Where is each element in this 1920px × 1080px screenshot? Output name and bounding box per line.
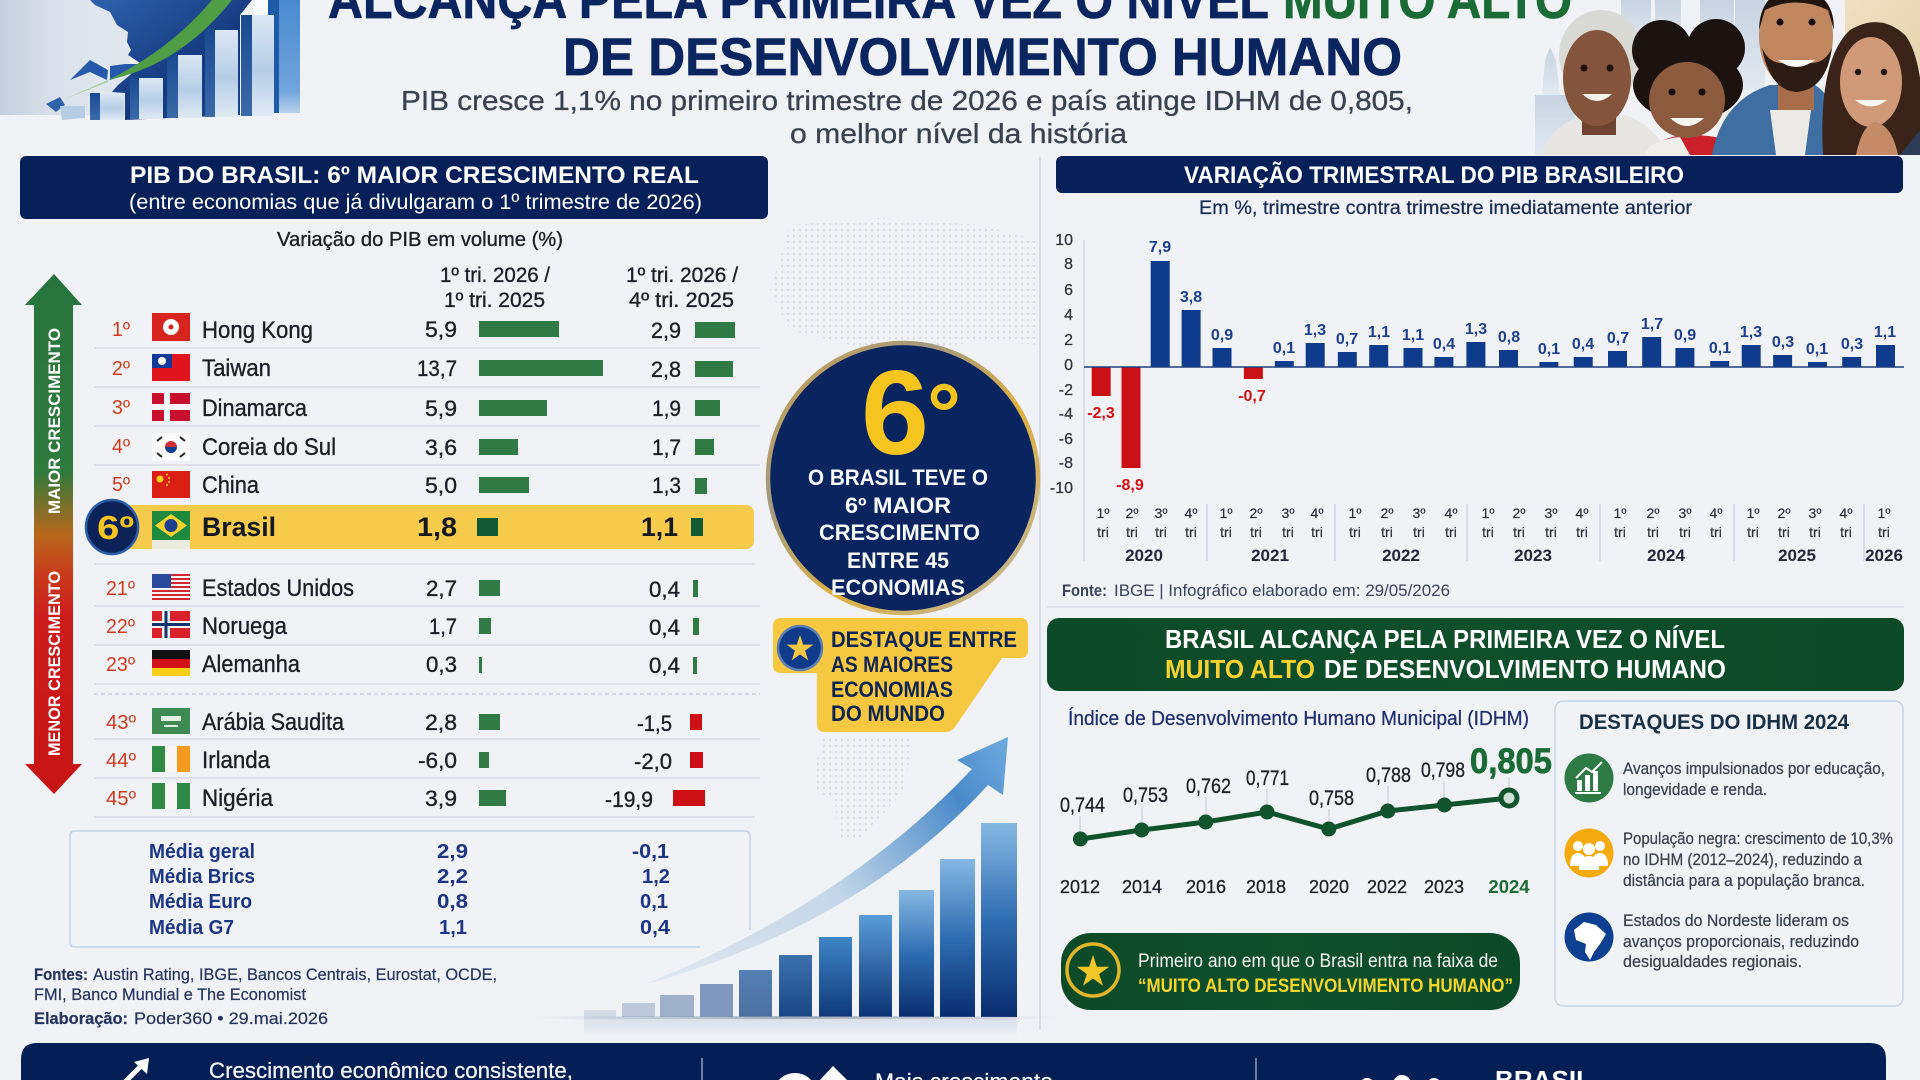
year labels: 2023 <box>1514 546 1552 565</box>
sources: FMI, Banco Mundial e The Economist <box>34 985 306 1004</box>
y axis: -6 <box>1059 431 1073 448</box>
panel heading: quarterly variation: VARIAÇÃO TRIMESTRAL DO PIB BRASILEIRO <box>1184 161 1684 189</box>
row: Irlanda: -6,0 <box>418 748 457 773</box>
highlight text: black population: distância para a população branca. <box>1623 871 1865 890</box>
row: Noruega: 0,4 <box>649 615 680 640</box>
averages box: 0,1 <box>640 891 668 913</box>
column headers: 1º tri. 2026 / <box>440 264 550 287</box>
circle: 6th place: 6º MAIOR <box>845 493 951 518</box>
subtitle <box>401 85 1413 149</box>
growth bars illustration <box>530 823 1060 1037</box>
panel: IDHM highlights <box>1555 701 1903 1006</box>
subtitle: PIB cresce 1,1% no primeiro trimestre de 2026 e país atinge IDHM de 0,805, <box>401 85 1413 116</box>
row: Noruega: Noruega <box>202 613 288 640</box>
quarter labels: tri <box>1679 524 1691 540</box>
badge: 6th place: 6º <box>97 509 134 546</box>
circle: 6th place: O BRASIL TEVE O <box>808 465 988 490</box>
quarter labels: tri <box>1311 524 1323 540</box>
quarter labels: 1º <box>1349 505 1361 521</box>
header illustration: people and skyline <box>1535 0 1920 155</box>
chart title: Índice de Desenvolvimento Humano Municipal (IDHM) <box>1068 707 1529 730</box>
panel heading: PIB do Brasil: (entre economias que já divulgaram o 1º trimestre de 2026) <box>129 190 702 214</box>
quarter labels: tri <box>1545 524 1557 540</box>
callout: first year in the band: “MUITO ALTO DESENVOLVIMENTO HUMANO” <box>1138 976 1513 997</box>
line chart: IDHM: 0,798 <box>1421 759 1465 782</box>
callout: highlight among largest economies: AS MAIORES <box>831 652 953 677</box>
value labels: 1,7 <box>1641 316 1663 333</box>
quarter labels: 2º <box>1513 505 1525 521</box>
averages box <box>70 831 750 947</box>
highlight text: northeast: desigualdades regionais. <box>1623 952 1802 971</box>
badge: 6th place <box>86 500 138 554</box>
row: Coreia do Sul: 3,6 <box>425 435 457 460</box>
row: Irlanda: Irlanda <box>202 747 271 774</box>
value labels: 0,4 <box>1433 336 1455 353</box>
quarter labels: tri <box>1445 524 1457 540</box>
highlights heading: DESTAQUES DO IDHM 2024 <box>1579 710 1849 734</box>
line chart: IDHM <box>1060 742 1552 897</box>
year labels: 2024 <box>1647 546 1685 565</box>
row: Dinamarca <box>112 393 720 422</box>
averages box: 0,4 <box>640 917 671 939</box>
value labels <box>1149 239 1896 358</box>
circle: 6th place <box>768 343 1038 613</box>
circle: 6th place: ° <box>927 367 961 462</box>
value labels: 0,1 <box>1806 341 1828 358</box>
averages box: 0,8 <box>437 891 468 913</box>
averages box: Média Brics <box>149 866 255 888</box>
quarter labels: 4º <box>1445 505 1457 521</box>
icon: star <box>778 626 822 670</box>
grandmother <box>1542 10 1668 155</box>
quarter labels: tri <box>1381 524 1393 540</box>
year labels: 2021 <box>1251 546 1289 565</box>
arrow: rising growth <box>643 737 1008 985</box>
row: Nigéria: -19,9 <box>605 787 653 812</box>
row: Hong Kong: 5,9 <box>425 317 457 342</box>
row: Alemanha: 0,3 <box>426 652 457 677</box>
row: Estados Unidos <box>106 574 698 602</box>
y axis: 6 <box>1064 282 1073 299</box>
quarter labels: tri <box>1778 524 1790 540</box>
y axis: -10 <box>1050 480 1073 497</box>
bar chart: quarterly GDP: -8,9 <box>1116 477 1144 494</box>
highlight text: black population <box>1623 829 1893 890</box>
value labels: 0,1 <box>1709 340 1731 357</box>
quarter labels: 1º <box>1097 505 1109 521</box>
row: Estados Unidos: Estados Unidos <box>202 575 354 602</box>
row: Dinamarca: 5,9 <box>425 396 457 421</box>
y axis: -8 <box>1059 455 1073 472</box>
line chart: IDHM: 2012 <box>1060 877 1100 897</box>
row: Hong Kong: 2,9 <box>651 318 681 343</box>
column headers: 1º tri. 2025 <box>444 289 545 312</box>
value labels: 7,9 <box>1149 239 1171 256</box>
quarter labels: tri <box>1126 524 1138 540</box>
value labels: 1,1 <box>1874 324 1896 341</box>
row: Nigéria: 45º <box>106 788 137 810</box>
value labels: 3,8 <box>1180 289 1202 306</box>
averages box: 2,2 <box>437 866 468 888</box>
averages box: 1,2 <box>642 866 670 888</box>
circle: 6th place: CRESCIMENTO <box>819 520 980 545</box>
value labels: 0,3 <box>1841 336 1863 353</box>
highlight text: northeast <box>1623 911 1859 971</box>
row: Dinamarca: 1,9 <box>652 396 681 421</box>
quarter labels: tri <box>1185 524 1197 540</box>
line chart: IDHM: 2023 <box>1424 877 1464 897</box>
quarter labels: 2º <box>1778 505 1790 521</box>
line chart: IDHM: 2014 <box>1122 877 1162 897</box>
bar chart: quarterly GDP: -0,7 <box>1238 388 1266 405</box>
chart caption: Variação do PIB em volume (%) <box>277 228 563 251</box>
row: Arábia Saudita <box>106 708 702 736</box>
highlight text: education <box>1623 759 1885 799</box>
quarter labels: tri <box>1155 524 1167 540</box>
arrow: growth scale: MENOR CRESCIMENTO <box>45 571 64 756</box>
line chart: IDHM: 0,758 <box>1309 787 1354 810</box>
quarter labels: 2º <box>1381 505 1393 521</box>
panel heading: very high development: MUITO ALTO <box>1165 654 1315 684</box>
bar chart: quarterly GDP <box>1050 232 1904 565</box>
value labels: 0,4 <box>1572 336 1594 353</box>
panel: quarterly GDP variation <box>1050 156 1904 600</box>
callout: highlight among largest economies: ECONOMIAS <box>831 677 953 702</box>
value labels: 0,3 <box>1772 334 1794 351</box>
row: Irlanda <box>106 746 703 774</box>
line chart: IDHM: 2020 <box>1309 877 1349 897</box>
quarter labels: tri <box>1576 524 1588 540</box>
row: Nigéria: 3,9 <box>425 786 457 811</box>
row: Alemanha: 23º <box>106 654 136 676</box>
line chart: IDHM: 0,805 <box>1470 742 1552 781</box>
quarter labels: 3º <box>1282 505 1294 521</box>
year labels: 2026 <box>1865 546 1903 565</box>
y axis: -2 <box>1059 382 1073 399</box>
quarter labels: 3º <box>1413 505 1425 521</box>
panel heading: very high development: BRASIL ALCANÇA PELA PRIMEIRA VEZ O NÍVEL <box>1165 624 1725 654</box>
value labels: 0,7 <box>1607 330 1629 347</box>
column headers <box>440 264 738 312</box>
line chart: IDHM: 2022 <box>1367 877 1407 897</box>
girl <box>1632 19 1746 155</box>
vertical divider <box>1039 157 1041 1030</box>
quarter labels: 4º <box>1185 505 1197 521</box>
chart source: IBGE | Infográfico elaborado em: 29/05/2026 <box>1114 581 1450 600</box>
y axis: 8 <box>1064 256 1073 273</box>
sources: Austin Rating, IBGE, Bancos Centrais, Eurostat, OCDE, <box>93 965 497 984</box>
row: Noruega <box>106 611 699 640</box>
man <box>1712 0 1837 155</box>
row: Dinamarca: 3º <box>112 397 131 419</box>
title <box>328 0 1572 87</box>
sources: Poder360 • 29.mai.2026 <box>134 1009 328 1028</box>
quarter labels: 1º <box>1220 505 1232 521</box>
quarter labels: tri <box>1097 524 1109 540</box>
row: Coreia do Sul <box>112 433 714 461</box>
value labels: 0,7 <box>1336 331 1358 348</box>
row: Coreia do Sul: 1,7 <box>652 435 681 460</box>
highlight text: black population: no IDHM (2012–2024), reduzindo a <box>1623 850 1862 869</box>
quarter labels: 4º <box>1840 505 1852 521</box>
row: Taiwan: 2,8 <box>651 357 681 382</box>
row: Brasil highlight: Brasil <box>202 512 276 542</box>
row: Estados Unidos: 2,7 <box>426 576 457 601</box>
quarter labels: 4º <box>1311 505 1323 521</box>
quarter labels: tri <box>1482 524 1494 540</box>
averages box: 2,9 <box>437 841 468 863</box>
row: Taiwan: Taiwan <box>202 355 271 382</box>
averages box: Média G7 <box>149 917 234 939</box>
row: Estados Unidos: 21º <box>106 578 136 600</box>
value labels: 0,9 <box>1211 327 1233 344</box>
quarter labels: tri <box>1250 524 1262 540</box>
quarter labels: tri <box>1840 524 1852 540</box>
icon: people <box>1360 1075 1441 1080</box>
line chart: IDHM: 0,771 <box>1246 767 1289 790</box>
row: Estados Unidos: 0,4 <box>649 577 680 602</box>
line chart: IDHM: 0,762 <box>1186 775 1231 798</box>
quarter labels: 1º <box>1878 505 1890 521</box>
row: China: China <box>202 472 260 499</box>
circle: 6th place: ENTRE 45 <box>847 548 949 573</box>
value labels: 0,8 <box>1498 329 1520 346</box>
y axis: 2 <box>1064 332 1073 349</box>
quarter labels: 2º <box>1250 505 1262 521</box>
sources <box>34 965 497 1028</box>
callout: highlight among largest economies: DO MUNDO <box>831 701 945 726</box>
quarter labels: 3º <box>1155 505 1167 521</box>
panel heading: quarterly variation <box>1056 156 1903 193</box>
year labels: 2020 <box>1125 546 1163 565</box>
row: Hong Kong: Hong Kong <box>202 317 313 344</box>
quarter labels: 2º <box>1647 505 1659 521</box>
dotted world map watermark <box>770 218 1038 838</box>
y axis: 10 <box>1055 232 1073 249</box>
line chart: IDHM: 0,788 <box>1366 764 1411 787</box>
panel heading: PIB do Brasil <box>20 156 768 219</box>
icon: Brazil map <box>1564 912 1614 962</box>
quarter labels: tri <box>1710 524 1722 540</box>
year labels: 2025 <box>1778 546 1816 565</box>
callout: first year in the band: Primeiro ano em que o Brasil entra na faixa de <box>1138 951 1498 972</box>
icon: globe with arrow <box>773 1066 847 1080</box>
row: China: 5º <box>112 474 131 496</box>
row: Alemanha: Alemanha <box>202 651 301 678</box>
row: Irlanda: -2,0 <box>634 749 672 774</box>
circle: 6th place: 6 <box>861 346 929 480</box>
row: Arábia Saudita: 43º <box>106 712 137 734</box>
quarter labels: 1º <box>1482 505 1494 521</box>
quarter labels: 4º <box>1576 505 1588 521</box>
quarter labels: tri <box>1220 524 1232 540</box>
quarter labels: 3º <box>1679 505 1691 521</box>
year labels <box>1125 546 1903 565</box>
year labels: 2022 <box>1382 546 1420 565</box>
row: Irlanda: 44º <box>106 750 137 772</box>
highlight text: education: longevidade e renda. <box>1623 780 1767 799</box>
averages box: -0,1 <box>632 841 669 863</box>
row: Noruega: 1,7 <box>429 614 457 639</box>
highlight text: northeast: avanços proporcionais, reduzindo <box>1623 932 1859 951</box>
highlight text: northeast: Estados do Nordeste lideram os <box>1623 911 1849 930</box>
chart subtitle: Em %, trimestre contra trimestre imediatamente anterior <box>1199 198 1693 219</box>
panel heading: very high development <box>1047 618 1904 691</box>
row: Dinamarca: Dinamarca <box>202 395 308 422</box>
header illustration: map and rising bars <box>46 0 300 120</box>
quarter labels: tri <box>1282 524 1294 540</box>
row: Arábia Saudita: 2,8 <box>425 710 457 735</box>
averages box: Média Euro <box>149 891 252 913</box>
value labels: 1,3 <box>1304 322 1326 339</box>
icon: people <box>1564 828 1614 878</box>
y axis: 4 <box>1064 307 1073 324</box>
highlight text: education: Avanços impulsionados por educação, <box>1623 759 1885 778</box>
icon: arrow up <box>125 1058 149 1080</box>
row: Arábia Saudita: Arábia Saudita <box>202 709 345 736</box>
row: Nigéria <box>106 783 705 812</box>
row: Coreia do Sul: Coreia do Sul <box>202 434 336 461</box>
row: China: 1,3 <box>652 473 681 498</box>
quarter labels: tri <box>1614 524 1626 540</box>
row: Alemanha <box>106 650 697 678</box>
quarter labels <box>1097 505 1890 540</box>
row: Brasil highlight <box>86 500 754 554</box>
quarter labels: tri <box>1809 524 1821 540</box>
row: Alemanha: 0,4 <box>649 653 680 678</box>
row: Hong Kong <box>112 313 735 344</box>
callout: highlight among largest economies: DESTAQUE ENTRE <box>831 627 1017 652</box>
quarter labels: tri <box>1747 524 1759 540</box>
row: Hong Kong: 1º <box>112 319 131 341</box>
quarter labels: 1º <box>1614 505 1626 521</box>
title: DE DESENVOLVIMENTO HUMANO <box>563 28 1402 87</box>
callout: highlight among largest economies <box>773 618 1028 732</box>
woman <box>1822 22 1920 155</box>
value labels: 0,1 <box>1538 341 1560 358</box>
panel: PIB ranking <box>20 156 768 1028</box>
subtitle: o melhor nível da história <box>790 118 1127 149</box>
value labels: 0,1 <box>1273 340 1295 357</box>
arrow: growth scale <box>25 274 82 794</box>
bars <box>1151 261 1895 367</box>
value labels: 1,1 <box>1368 324 1390 341</box>
y axis: 0 <box>1064 357 1073 374</box>
panel heading: PIB do Brasil: PIB DO BRASIL: 6º MAIOR CRESCIMENTO REAL <box>130 162 699 189</box>
row: Noruega: 22º <box>106 616 136 638</box>
panel: human development <box>1047 618 1904 1010</box>
row: Taiwan: 13,7 <box>417 356 457 381</box>
column headers: 4º tri. 2025 <box>629 289 734 312</box>
value labels: 0,9 <box>1674 327 1696 344</box>
quarter labels: 2º <box>1126 505 1138 521</box>
row: China <box>112 471 707 499</box>
averages box: 1,1 <box>439 917 467 939</box>
line chart: IDHM: 0,753 <box>1123 784 1168 807</box>
row: Taiwan: 2º <box>112 358 131 380</box>
value labels: 1,3 <box>1740 324 1762 341</box>
line chart: IDHM: 2018 <box>1246 877 1286 897</box>
chart source: Fonte: <box>1062 581 1107 600</box>
column headers: 1º tri. 2026 / <box>626 264 738 287</box>
circle: 6th place: ECONOMIAS <box>831 575 965 600</box>
row: Taiwan <box>112 354 733 382</box>
sources: Fontes: <box>34 965 88 984</box>
line chart: IDHM: 0,744 <box>1060 794 1105 817</box>
icon: growth chart <box>1564 754 1614 802</box>
bar chart: quarterly GDP: -2,3 <box>1087 405 1115 422</box>
line chart: IDHM: 2024 <box>1488 876 1530 897</box>
quarter labels: 4º <box>1710 505 1722 521</box>
row: Brasil highlight: 1,1 <box>641 512 678 542</box>
row: Brasil highlight: 1,8 <box>417 512 457 542</box>
row: China: 5,0 <box>425 473 457 498</box>
quarter labels: tri <box>1413 524 1425 540</box>
arrow: growth scale: MAIOR CRESCIMENTO <box>45 328 64 514</box>
averages box: Média geral <box>149 841 255 863</box>
quarter labels: 1º <box>1747 505 1759 521</box>
quarter labels: tri <box>1647 524 1659 540</box>
value labels: 1,1 <box>1402 327 1424 344</box>
bottom banner <box>21 1043 1886 1080</box>
panel heading: very high development: DE DESENVOLVIMENTO HUMANO <box>1324 654 1726 684</box>
value labels: 1,3 <box>1465 321 1487 338</box>
row: Coreia do Sul: 4º <box>112 436 131 458</box>
sources: Elaboração: <box>34 1009 128 1028</box>
line chart: IDHM: 2016 <box>1186 877 1226 897</box>
y axis <box>1050 232 1073 497</box>
quarter labels: tri <box>1878 524 1890 540</box>
y axis: -4 <box>1059 406 1073 423</box>
quarter labels: 3º <box>1545 505 1557 521</box>
quarter labels: tri <box>1513 524 1525 540</box>
row: Arábia Saudita: -1,5 <box>637 711 672 736</box>
row: Nigéria: Nigéria <box>202 785 274 812</box>
callout: first year in the band <box>1061 933 1520 1010</box>
quarter labels: 3º <box>1809 505 1821 521</box>
quarter labels: tri <box>1349 524 1361 540</box>
